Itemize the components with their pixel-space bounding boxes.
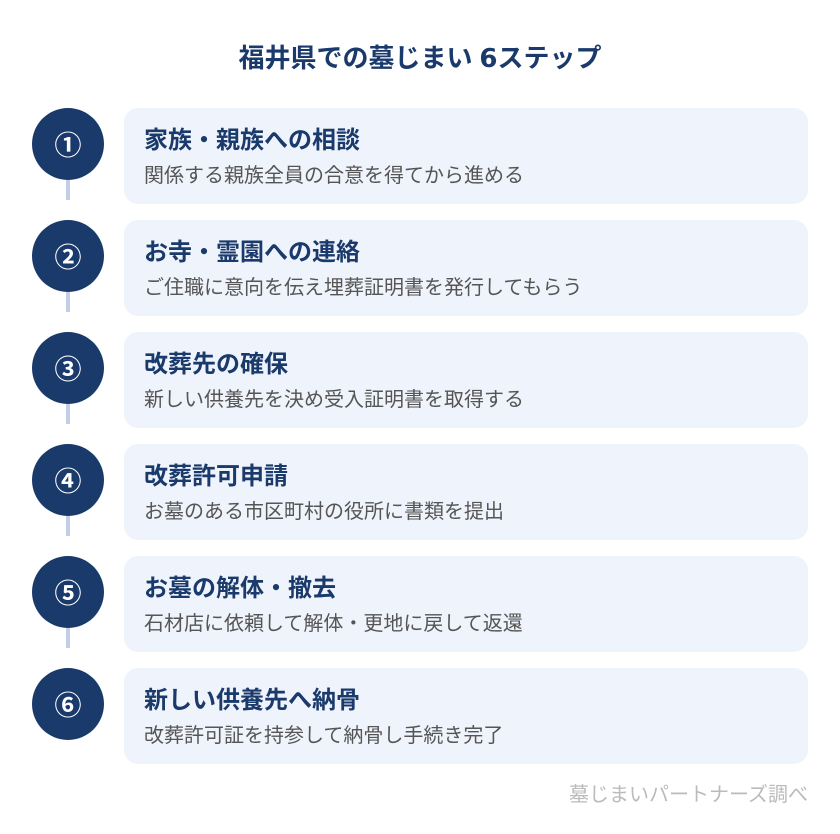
card 3 [124,332,808,428]
card 2 heading: お寺・霊園への連絡 [144,232,360,267]
card 2 [124,220,808,316]
card 6 description: 改葬許可証を持参して納骨し手続き完了 [144,719,503,748]
card 5 description: 石材店に依頼して解体・更地に戻して返還 [144,607,523,636]
card 5 [124,556,808,652]
card 3 description: 新しい供養先を決め受入証明書を取得する [144,383,524,412]
step 4 [32,444,808,540]
card 3 heading: 改葬先の確保 [144,344,288,379]
step 6 [32,668,808,764]
card 1 description: 関係する親族全員の合意を得てから進める [144,159,524,188]
card 4 [124,444,808,540]
source note: 墓じまいパートナーズ調べ [569,778,808,807]
connector line 4 [66,516,70,536]
connector line 5 [66,628,70,648]
number badge 4 [32,444,104,516]
step 2 [32,220,808,316]
number badge 2: ② [54,236,82,275]
number badge 3 [32,332,104,404]
connector line 1 [66,180,70,200]
number badge 3: ③ [54,348,82,387]
number badge 5: ⑤ [54,572,82,611]
number badge 4: ④ [54,460,82,499]
card 1 [124,108,808,204]
number badge 6 [32,668,104,740]
card 6 [124,668,808,764]
number badge 5 [32,556,104,628]
card 2 description: ご住職に意向を伝え埋葬証明書を発行してもらう [144,271,582,300]
step 5 [32,556,808,652]
step 1 [32,108,808,204]
step 3 [32,332,808,428]
card 1 heading: 家族・親族への相談 [144,120,360,155]
number badge 1: ① [54,124,82,163]
number badge 1 [32,108,104,180]
connector line 2 [66,292,70,312]
card 4 description: お墓のある市区町村の役所に書類を提出 [144,495,504,524]
connector line 3 [66,404,70,424]
title: 福井県での墓じまい 6ステップ [238,38,602,75]
card 4 heading: 改葬許可申請 [144,456,288,491]
number badge 2 [32,220,104,292]
card 6 heading: 新しい供養先へ納骨 [144,680,360,715]
number badge 6: ⑥ [54,684,82,723]
card 5 heading: お墓の解体・撤去 [144,568,336,603]
